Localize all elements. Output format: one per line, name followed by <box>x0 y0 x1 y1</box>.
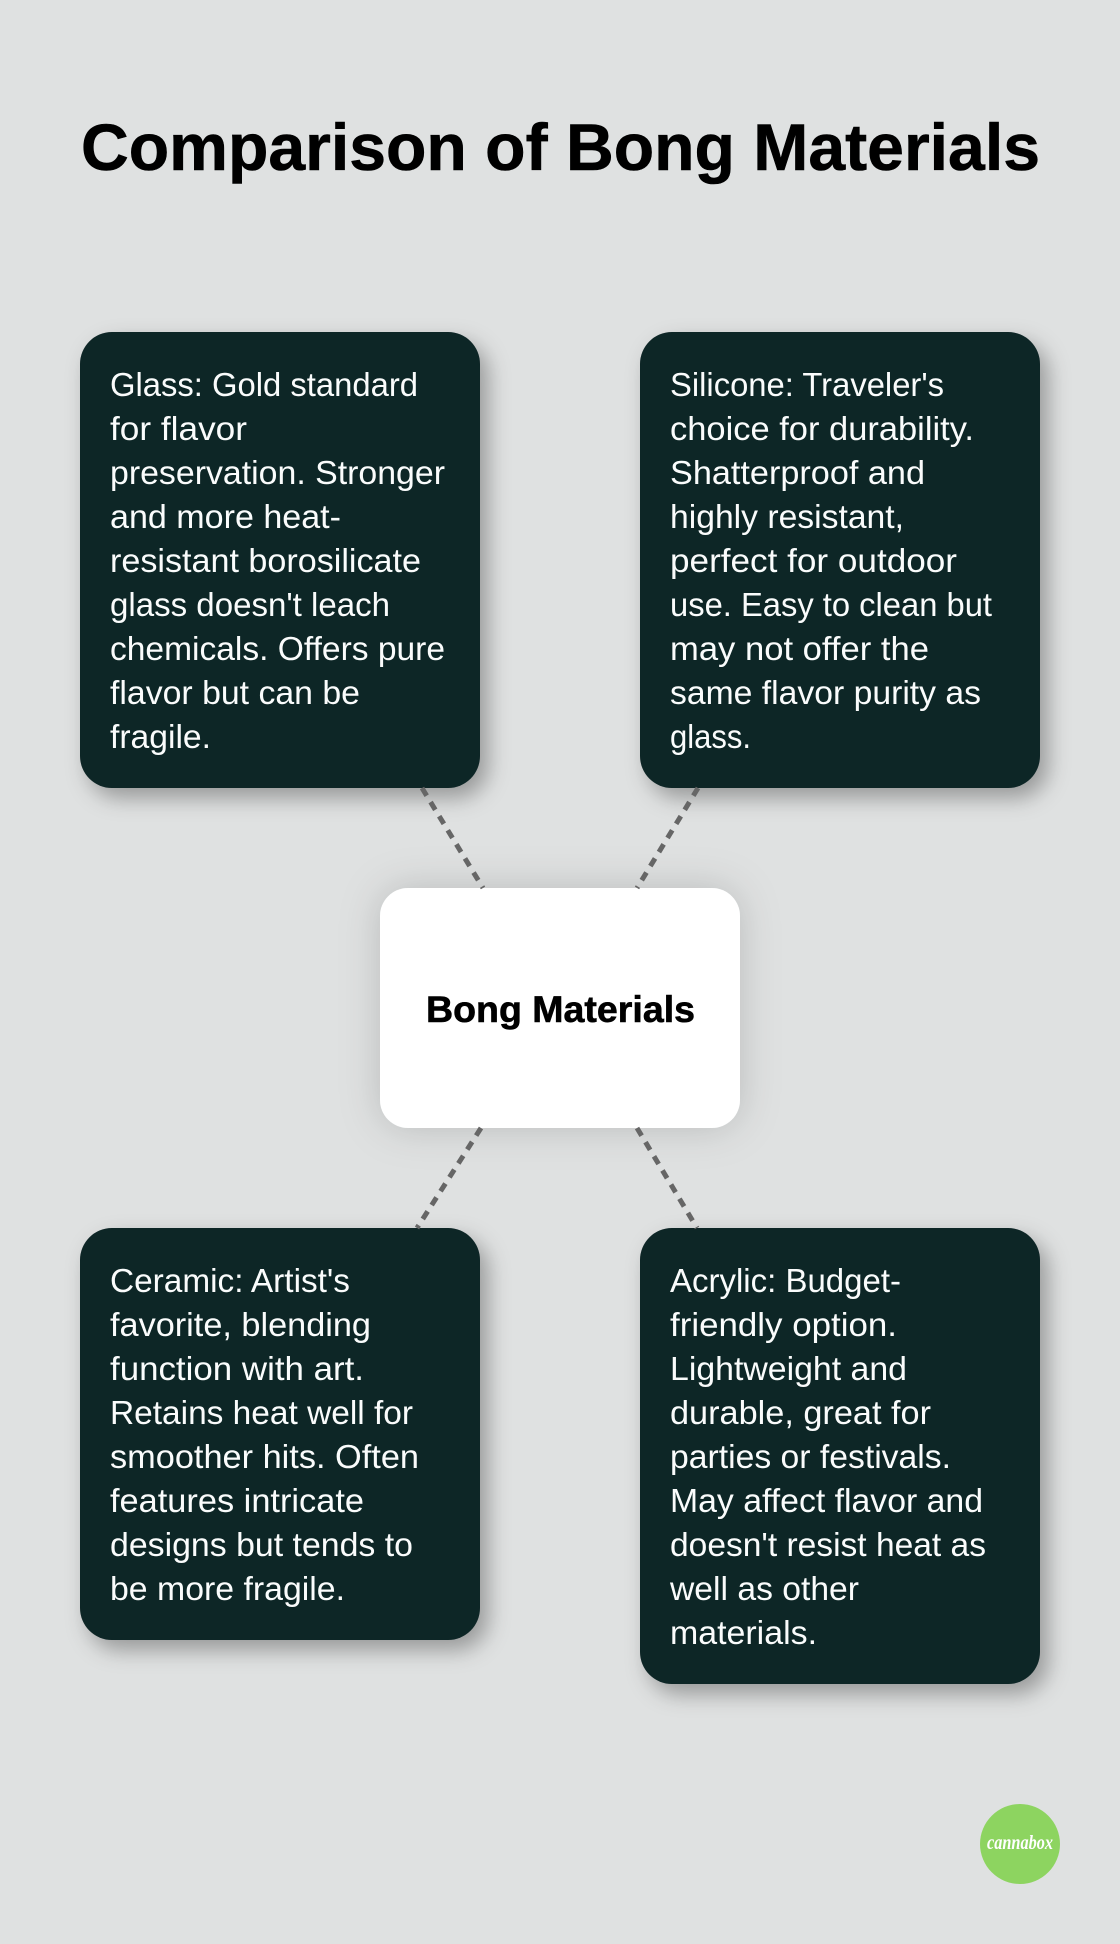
silicone description text: may not offer the <box>670 630 929 667</box>
panel: center node <box>380 888 740 1128</box>
silicone description text <box>670 366 992 755</box>
glass description text: resistant borosilicate <box>110 542 421 579</box>
acrylic description text: materials. <box>670 1614 817 1651</box>
silicone card background <box>640 332 1040 788</box>
acrylic description text: Acrylic: Budget- <box>670 1262 901 1299</box>
logo: cannabox badge <box>980 1804 1060 1884</box>
ceramic description text: smoother hits. Often <box>110 1438 419 1475</box>
panel: acrylic <box>640 1228 1040 1684</box>
silicone description text: Silicone: Traveler's <box>670 366 944 403</box>
connector: glass to center <box>422 788 483 888</box>
panel: silicone <box>640 332 1040 788</box>
center node label: Bong Materials <box>426 989 695 1030</box>
glass description text: for flavor <box>110 410 247 447</box>
logo circle <box>980 1804 1060 1884</box>
ceramic description text <box>110 1262 419 1607</box>
connector: silicone to center <box>637 788 698 888</box>
glass description text <box>110 366 445 755</box>
title: Comparison of Bong Materials <box>81 110 1040 184</box>
ceramic card background <box>80 1228 480 1640</box>
ceramic description text: function with art. <box>110 1350 364 1387</box>
glass description text: glass doesn't leach <box>110 586 390 623</box>
ceramic description text: Ceramic: Artist's <box>110 1262 350 1299</box>
glass description text: Glass: Gold standard <box>110 366 418 403</box>
glass card background <box>80 332 480 788</box>
panel: glass <box>80 332 480 788</box>
acrylic description text: durable, great for <box>670 1394 931 1431</box>
panel: ceramic <box>80 1228 480 1640</box>
logo wordmark: cannabox <box>987 1832 1053 1854</box>
glass description text: and more heat- <box>110 498 341 535</box>
silicone description text: Shatterproof and <box>670 454 925 491</box>
glass description text: preservation. Stronger <box>110 454 445 491</box>
silicone description text: same flavor purity as <box>670 674 981 711</box>
acrylic description text: well as other <box>669 1570 859 1607</box>
glass description text: flavor but can be <box>110 674 360 711</box>
acrylic description text: doesn't resist heat as <box>670 1526 986 1563</box>
glass description text: fragile. <box>110 718 211 755</box>
center node background <box>380 888 740 1128</box>
connector: center to ceramic <box>417 1128 481 1228</box>
silicone description text: glass. <box>670 718 751 755</box>
ceramic description text: designs but tends to <box>110 1526 413 1563</box>
ceramic description text: features intricate <box>110 1482 364 1519</box>
silicone description text: use. Easy to clean but <box>670 586 992 623</box>
ceramic description text: favorite, blending <box>110 1306 371 1343</box>
silicone description text: highly resistant, <box>670 498 904 535</box>
acrylic description text: friendly option. <box>670 1306 897 1343</box>
silicone description text: choice for durability. <box>670 410 974 447</box>
silicone description text: perfect for outdoor <box>670 542 957 579</box>
acrylic description text: parties or festivals. <box>670 1438 951 1475</box>
ceramic description text: be more fragile. <box>110 1570 345 1607</box>
acrylic description text: Lightweight and <box>670 1350 907 1387</box>
glass description text: chemicals. Offers pure <box>110 630 445 667</box>
acrylic card background <box>640 1228 1040 1684</box>
connector: center to acrylic <box>637 1128 697 1228</box>
ceramic description text: Retains heat well for <box>110 1394 413 1431</box>
acrylic description text: May affect flavor and <box>670 1482 983 1519</box>
acrylic description text <box>669 1262 986 1651</box>
